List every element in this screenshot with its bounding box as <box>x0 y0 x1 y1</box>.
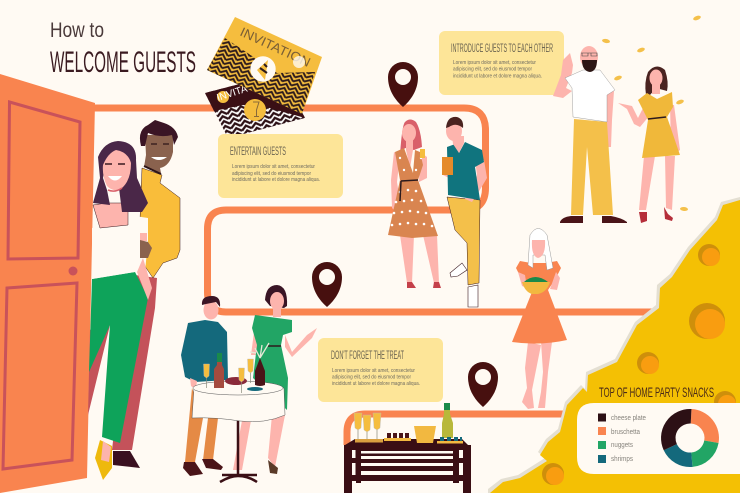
man in teal sweater <box>181 296 228 476</box>
woman's chest <box>93 203 128 228</box>
callout: introduce guests: Lorem ipsum dolor sit amet, consectetur <box>453 60 536 66</box>
arms <box>391 152 427 213</box>
callout: introduce guests: INTRODUCE GUESTS TO EACH OTHER <box>451 43 553 55</box>
shoes <box>560 216 627 223</box>
woman in yellow dress <box>618 66 680 223</box>
callout: don't forget the treat: incididunt ut labore et dolore magna aliqua. <box>332 381 420 387</box>
food <box>225 377 247 385</box>
man's shoe <box>113 451 140 468</box>
shoes <box>183 459 223 476</box>
woman's shoe <box>95 440 112 480</box>
callout: entertain guests: incididunt ut labore et dolore magna aliqua. <box>232 177 320 183</box>
face <box>402 124 416 142</box>
champagne <box>420 149 425 158</box>
table legs <box>344 445 471 493</box>
hair <box>265 285 287 308</box>
woman in polka dot dress <box>388 120 441 288</box>
woman's arm and hand <box>137 258 152 300</box>
plate <box>247 387 263 391</box>
woman's top <box>92 215 148 279</box>
yellow invitation card <box>207 17 322 114</box>
man's sweater <box>140 168 180 278</box>
face <box>650 70 662 86</box>
invitation cards <box>205 17 322 138</box>
title: WELCOME GUESTS <box>50 46 196 79</box>
belt <box>648 117 666 119</box>
right arm <box>606 91 614 147</box>
callout: introduce guests: adipiscing elit, sed do eiusmod tempor <box>453 66 532 72</box>
callout: introduce guests <box>439 31 564 95</box>
man's hair <box>140 120 178 146</box>
glasses <box>581 53 597 56</box>
head <box>580 46 598 68</box>
icon: map pin 2 <box>312 262 342 307</box>
invitation cards: INVITATION <box>238 24 313 70</box>
table frame <box>345 439 470 481</box>
title <box>50 19 196 79</box>
yellow bowl <box>414 426 436 443</box>
callout: entertain guests: ENTERTAIN GUESTS <box>230 146 286 158</box>
panel: top snacks <box>577 403 740 474</box>
title: How to <box>50 19 104 42</box>
yellow accent circle on dark card <box>217 91 229 103</box>
man's face details <box>151 143 169 145</box>
door <box>0 74 95 493</box>
legs <box>400 235 439 283</box>
olive bottle <box>442 403 453 438</box>
shoes <box>268 460 278 474</box>
hand <box>190 378 197 390</box>
cheese holes <box>542 244 736 485</box>
neck <box>406 140 413 168</box>
buffet table <box>344 403 471 493</box>
salad bowl <box>522 282 550 294</box>
man's head and neck <box>144 135 173 173</box>
face <box>532 240 545 258</box>
raised arm and hand <box>553 53 573 98</box>
canape tray <box>384 438 411 441</box>
door upper panel <box>8 102 80 259</box>
face <box>270 292 284 310</box>
couple at the door <box>88 120 180 480</box>
man's collar <box>144 166 161 174</box>
arms <box>443 160 487 202</box>
icon: map pin 1 <box>388 62 418 107</box>
orange route path <box>90 108 660 445</box>
legs <box>233 415 285 470</box>
white t-shirt <box>565 70 615 122</box>
glasses <box>204 359 254 382</box>
hair <box>202 296 220 307</box>
face <box>446 121 462 141</box>
man's smile <box>151 157 167 160</box>
black invitation card <box>205 73 305 138</box>
woman's eyes <box>105 163 125 165</box>
shrimp tray <box>437 441 463 444</box>
icon: map pin 3 <box>468 362 498 407</box>
legs <box>639 156 675 210</box>
flute tray <box>355 439 383 442</box>
woman's smile <box>108 176 122 180</box>
legend: nuggets <box>611 442 633 449</box>
sweater <box>181 320 228 382</box>
trousers <box>571 119 613 215</box>
confetti <box>602 15 701 211</box>
hair <box>400 120 422 155</box>
tablecloth <box>192 388 285 422</box>
flowers <box>250 343 269 358</box>
white circle accent <box>293 56 305 68</box>
callout: don't forget the treat: DON'T FORGET THE TREAT <box>331 350 404 362</box>
dress <box>638 92 680 158</box>
beard <box>582 60 597 72</box>
arms <box>618 103 680 153</box>
callout: entertain guests: Lorem ipsum dolor sit amet, consectetur <box>232 164 315 170</box>
round table with drinks <box>192 343 285 482</box>
man's trousers <box>88 275 157 450</box>
legend <box>598 414 646 463</box>
party hat medallion <box>250 56 276 82</box>
hair <box>446 117 463 128</box>
table base <box>220 418 257 482</box>
neck <box>452 136 464 153</box>
cheese background <box>488 197 740 493</box>
callout: don't forget the treat: Lorem ipsum dolor sit amet, consectetur <box>332 368 415 374</box>
face <box>204 300 218 320</box>
bottle <box>214 353 224 388</box>
woman's face <box>103 150 131 190</box>
vase <box>255 358 265 386</box>
woman's trousers <box>89 272 148 443</box>
belt <box>400 180 418 201</box>
belt <box>268 345 281 347</box>
champagne flutes <box>354 413 381 432</box>
waving arm <box>285 328 317 357</box>
man's hand on her arm <box>140 240 152 258</box>
callout: entertain guests <box>218 134 343 198</box>
legend: shrimps <box>611 456 633 463</box>
legs <box>522 342 552 409</box>
trousers <box>447 197 480 285</box>
callout: introduce guests: incididunt ut labore et dolore magna aliqua. <box>453 74 542 80</box>
shoes <box>407 282 441 288</box>
woman holding salad bowl <box>512 228 567 409</box>
t-shirt <box>447 142 484 200</box>
bald man with beard <box>553 46 627 223</box>
table top edge <box>193 381 283 395</box>
trousers <box>185 388 218 462</box>
shoes <box>450 263 478 307</box>
champagne glass medallion <box>244 99 266 121</box>
man in teal t-shirt <box>442 117 487 307</box>
donut chart <box>668 416 712 460</box>
invitation cards: INVITA <box>216 84 249 104</box>
white hair <box>528 228 553 270</box>
dress <box>388 148 438 238</box>
orange cup <box>442 157 453 175</box>
hair <box>645 66 668 95</box>
arms <box>518 272 560 290</box>
dress <box>512 261 567 344</box>
callout: entertain guests: adipiscing elit, sed do eiusmod tempor <box>232 171 311 177</box>
door lower panel <box>3 283 77 469</box>
woman's hair <box>93 141 148 212</box>
left arm <box>251 332 259 355</box>
door knob <box>68 266 78 276</box>
legend: cheese plate <box>611 415 646 422</box>
heels <box>639 207 673 223</box>
callout: don't forget the treat <box>318 338 443 402</box>
woman in green dress <box>233 285 317 474</box>
white slats <box>352 450 463 475</box>
dress <box>252 315 292 410</box>
legend: bruschetta <box>611 429 640 436</box>
polka dots <box>391 157 433 227</box>
callout: don't forget the treat: adipiscing elit, sed do eiusmod tempor <box>332 374 411 380</box>
